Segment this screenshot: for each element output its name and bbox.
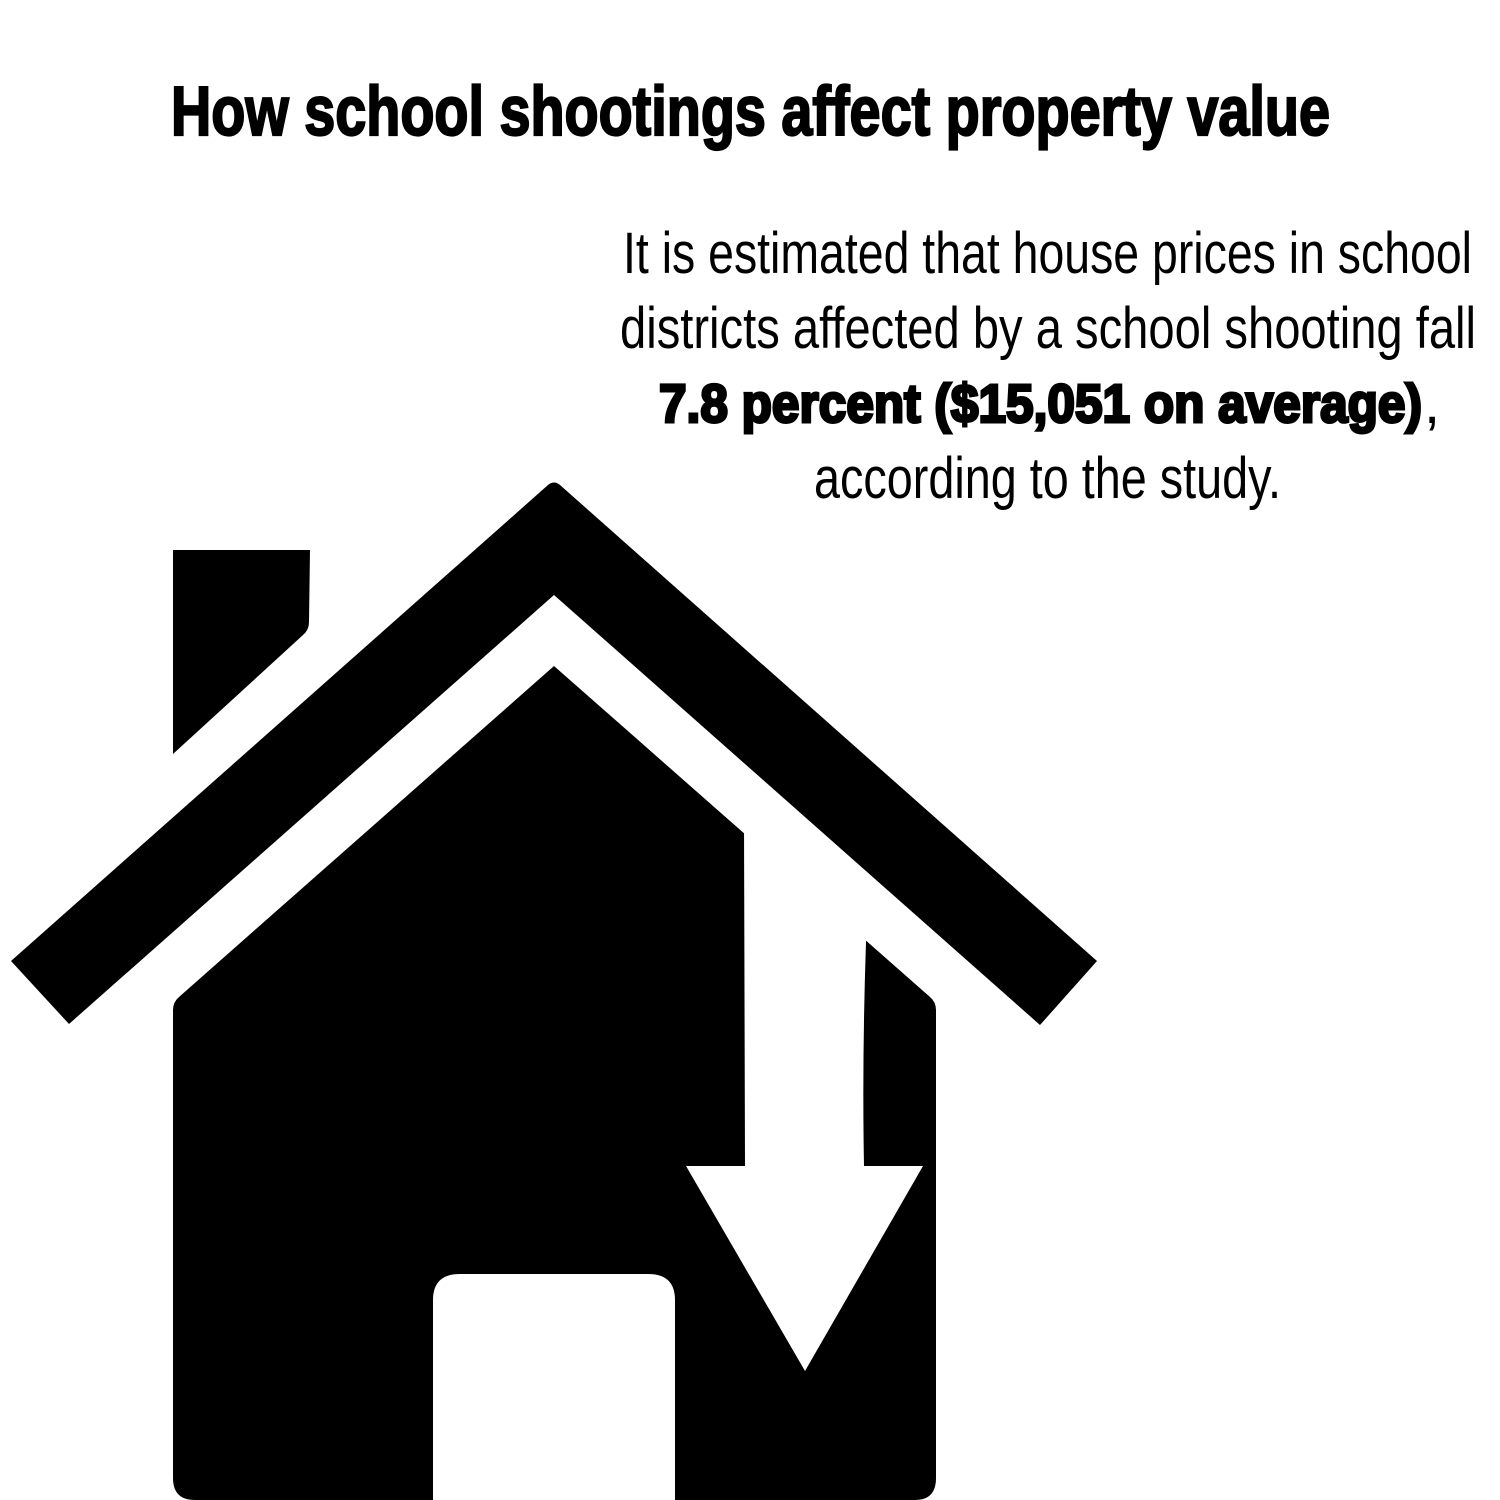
description text block: according to the study. xyxy=(814,446,1281,511)
description text block xyxy=(620,221,1476,511)
icon: house with falling arrow xyxy=(11,482,1097,1500)
house body xyxy=(173,666,936,1500)
description text block: 7.8 percent ($15,051 on average) xyxy=(659,374,1422,434)
roof xyxy=(11,482,1097,1025)
down arrow xyxy=(686,820,923,1371)
chimney xyxy=(173,550,310,754)
description text block: , xyxy=(1424,371,1440,436)
